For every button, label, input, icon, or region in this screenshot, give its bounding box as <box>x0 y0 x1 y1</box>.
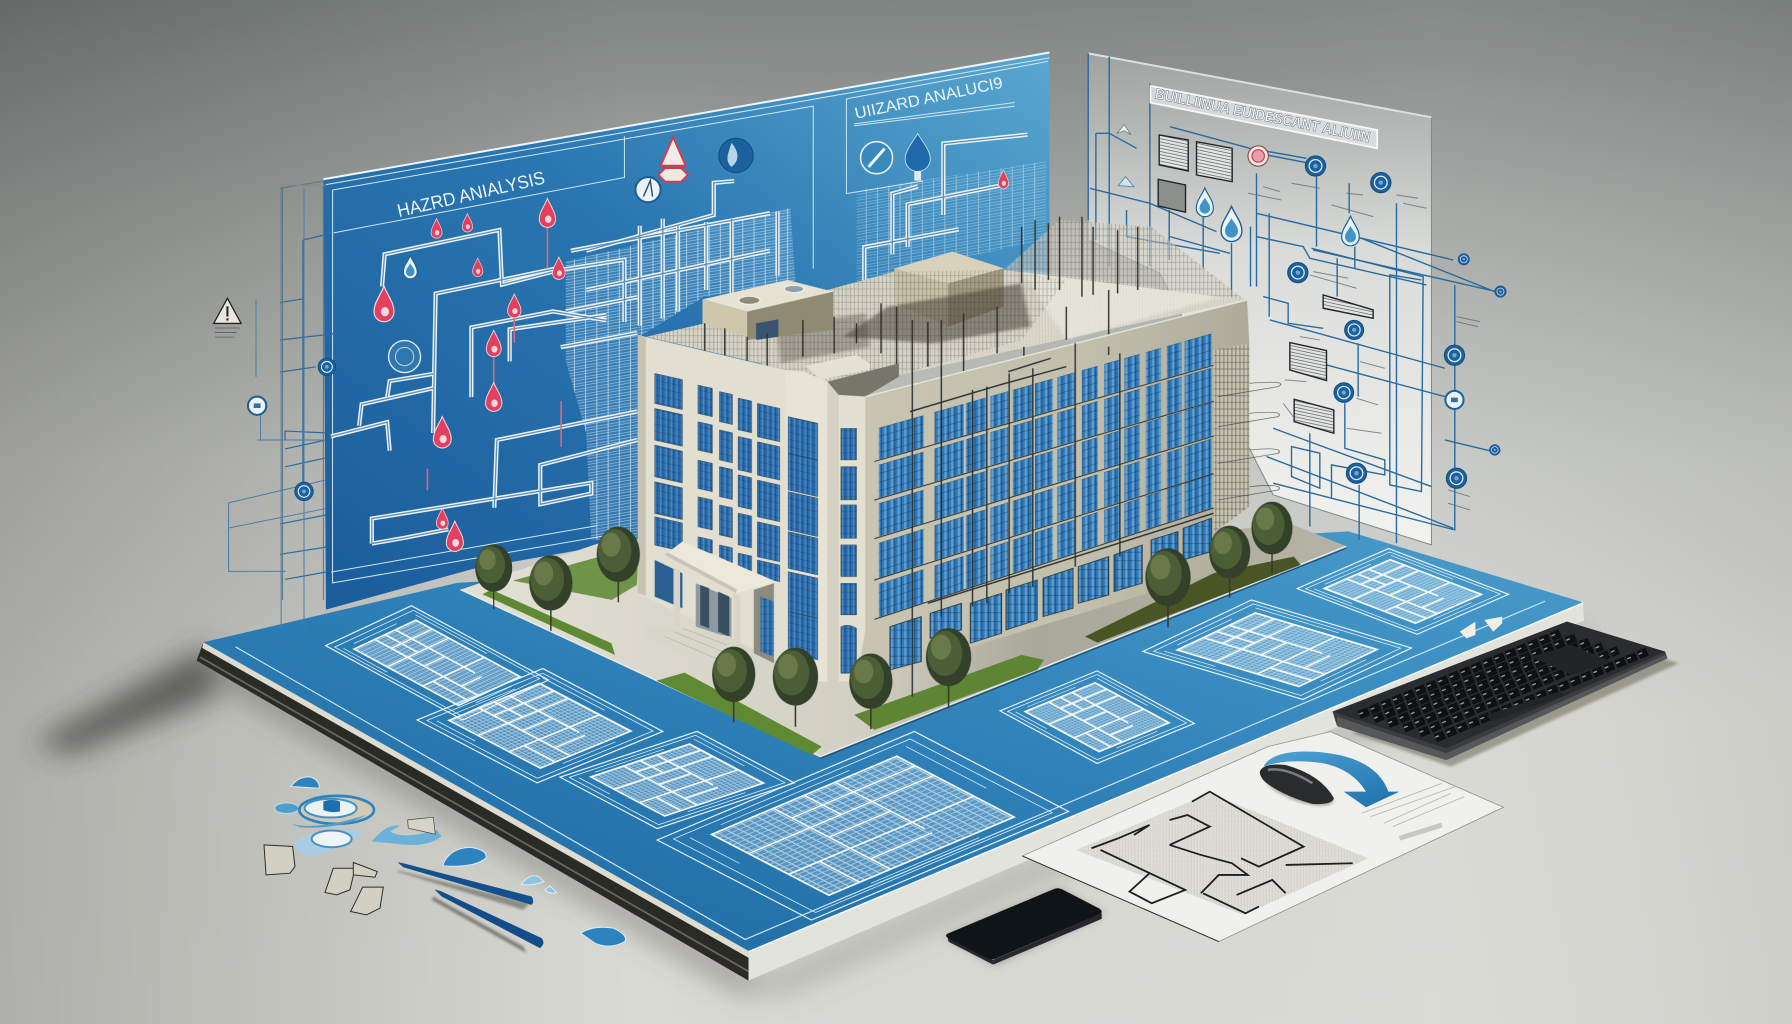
left facade <box>638 335 827 681</box>
sheet plan <box>1076 783 1464 915</box>
red leak markers <box>374 170 1009 551</box>
facade down pipes <box>910 343 1214 697</box>
mechanical unit: tan block <box>894 252 1004 327</box>
left facade windows <box>655 373 818 660</box>
key rows <box>1359 633 1647 738</box>
icon: connector nodes <box>248 358 336 501</box>
shadow: platform cast on desk <box>34 623 1594 997</box>
entrance portico <box>647 542 776 667</box>
printed floor plan sheet <box>1022 732 1504 942</box>
panel: hazard analysis blueprint <box>280 52 1050 610</box>
keyboard <box>1333 622 1679 767</box>
panel: transparent building assessment sheet <box>1088 53 1506 545</box>
right facade window grid <box>874 333 1214 619</box>
platform blueprint surface <box>203 531 1583 951</box>
building site ground <box>461 523 1346 759</box>
trees <box>475 502 1293 729</box>
right facade <box>839 300 1249 682</box>
floor plan drawings <box>326 549 1509 920</box>
corner pier <box>785 370 827 682</box>
small label rows <box>1248 183 1480 510</box>
dense service lines <box>566 208 795 540</box>
diagram lines <box>1088 53 1496 543</box>
title banner <box>1151 86 1377 148</box>
icon: warning triangle with red stop sign <box>658 137 688 182</box>
icons: water drops and status dials <box>1196 146 1506 488</box>
platform side edges <box>197 602 1584 981</box>
external connector lines <box>280 235 341 579</box>
platform border lines <box>235 601 1545 939</box>
right sheet title: BUILLIINUA EUIDESCANT ALIUIIN <box>1153 87 1372 146</box>
scaffolding <box>1214 343 1281 533</box>
blueprint frame lines <box>326 58 1050 583</box>
pens <box>397 862 543 953</box>
site edge <box>461 546 1346 757</box>
blueprint corner clips <box>1460 617 1502 638</box>
rear roof wire structure <box>1004 220 1245 300</box>
heading: upper hazard analysis: UIIZARD ANALUCI9 <box>853 75 1004 123</box>
sketch: eye lens icon <box>275 796 442 856</box>
roof deck with wiring <box>647 217 1245 382</box>
smartphone <box>946 888 1104 965</box>
outer left lines and connector icons <box>214 185 336 629</box>
heading: hazard analysis: HAZRD ANIALYSIS <box>395 167 547 221</box>
hazard icons and leak markers <box>374 134 1009 551</box>
plumbing pipe network <box>331 135 1028 544</box>
water drops <box>291 777 626 946</box>
building <box>638 217 1281 697</box>
icon: gauge circles <box>389 138 893 373</box>
roof hatch <box>805 355 870 380</box>
assessment tables <box>1158 135 1373 433</box>
sketch: note cards <box>264 845 383 915</box>
recessed corner shadow <box>827 363 899 397</box>
mouse <box>1258 764 1340 813</box>
warning triangles <box>1117 125 1134 187</box>
icon: warning triangle <box>214 298 241 337</box>
ground floor windows <box>890 518 1211 670</box>
parapet highlight <box>865 300 1247 397</box>
arrow: curved blue <box>1263 751 1400 807</box>
rising conduit lines <box>705 217 1138 380</box>
blue water drops <box>403 134 930 279</box>
panel: blueprint platform <box>197 531 1584 981</box>
entry steps <box>647 627 731 667</box>
grass strips <box>482 557 1301 755</box>
desk items: left sketches, pens and drops <box>264 777 626 953</box>
key highlights <box>1359 632 1647 737</box>
hazard panel titles <box>395 75 1004 221</box>
narrow corner windows <box>841 428 856 673</box>
wire tangle shading <box>776 270 1223 363</box>
red service risers <box>427 223 561 490</box>
mechanical unit: fan housing <box>702 280 833 340</box>
